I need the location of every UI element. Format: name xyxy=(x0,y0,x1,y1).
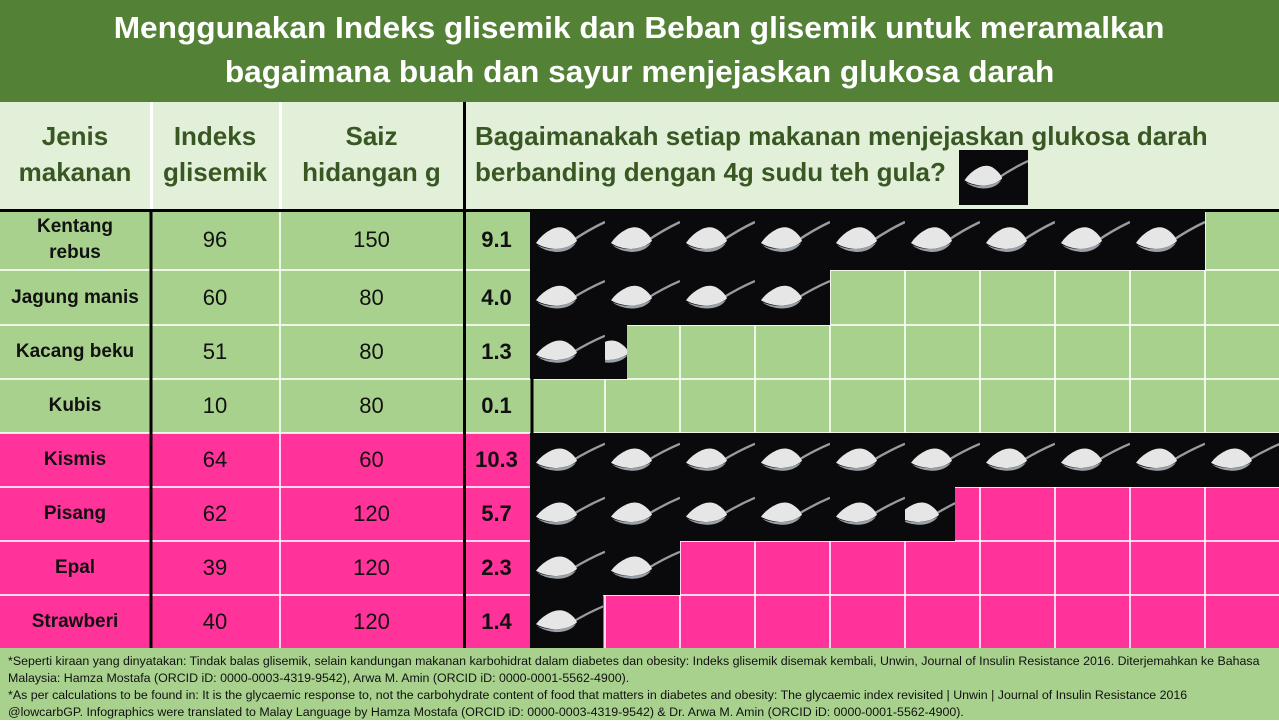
row: Jagung manis xyxy=(0,270,1279,325)
footer: references: *As per calculations to be found in: It is the glycaemic response to, not the carbohydrate content of food that matters in diabetes and obesity: The glycaemic index revisited | Unwin | Journal of Insulin Resistance 2016 xyxy=(8,688,1187,702)
row: Kentang rebus: 9.1 xyxy=(481,227,512,252)
table rows xyxy=(0,212,1279,648)
row: Jagung manis: 4.0 xyxy=(481,284,512,310)
row: Kacang beku: Kacang beku xyxy=(16,341,134,362)
row: Kentang rebus: Kentang xyxy=(37,216,113,237)
row: Pisang: 5.7 xyxy=(481,501,512,526)
header: question: Bagaimanakah setiap makanan menjejaskan glukosa darah xyxy=(475,121,1208,151)
row: Kentang rebus xyxy=(0,210,1279,270)
row: Jagung manis: 80 xyxy=(359,284,384,310)
row: Jagung manis: Jagung manis xyxy=(11,286,139,308)
row: Epal: Epal xyxy=(55,557,95,578)
row: Strawberi xyxy=(0,595,1279,648)
row: Kismis: 64 xyxy=(203,447,227,472)
footer: references xyxy=(0,648,1279,720)
row: Kubis: Kubis xyxy=(49,395,101,416)
row: Strawberi: Strawberi xyxy=(32,610,118,632)
row: Kacang beku xyxy=(0,325,1279,379)
row: Strawberi: 120 xyxy=(353,608,390,634)
spoons: Kacang beku 1.3 xyxy=(530,325,627,379)
row: Pisang: 62 xyxy=(203,501,227,526)
row: Kacang beku: 51 xyxy=(203,339,227,364)
row: Kentang rebus: 96 xyxy=(203,227,227,252)
footer: references: Malaysia: Hamza Mostafa (ORCID iD: 0000-0003-4319-9542), Arwa M. Amin (ORCID iD: 0000-0001-5562-4900). xyxy=(8,671,629,685)
footer: references: @lowcarbGP. Infographics were translated to Malay Language by Hamza Mostafa (ORCID iD: 0000-0003-4319-9542) & Dr. Arwa M. Amin (ORCID iD: 0000-0001-5562-4900). xyxy=(8,705,964,719)
row: Epal xyxy=(0,541,1279,595)
header: jenis makanan: makanan xyxy=(19,157,131,187)
row: Kismis: 60 xyxy=(359,447,384,472)
row: Kismis: Kismis xyxy=(44,449,106,470)
spoons: Pisang 5.7 xyxy=(530,487,955,541)
spoons: Jagung manis 4 xyxy=(530,270,830,325)
header: saiz hidangan: hidangan g xyxy=(302,157,441,187)
header: question xyxy=(475,121,1208,187)
title xyxy=(0,0,1279,102)
spoons: Kismis 10 xyxy=(530,433,1279,487)
row: Kentang rebus: rebus xyxy=(49,242,101,263)
title: Menggunakan Indeks glisemik dan Beban glisemik untuk meramalkan xyxy=(114,10,1165,45)
row: Pisang: 120 xyxy=(353,501,390,526)
header: indeks glisemik: Indeks xyxy=(174,121,256,151)
spoons: Epal 2 xyxy=(530,541,680,595)
header: jenis makanan: Jenis xyxy=(42,121,108,151)
row: Kentang rebus: 150 xyxy=(353,227,390,252)
header: jenis makanan xyxy=(19,121,131,187)
title: bagaimana buah dan sayur menjejaskan glukosa darah xyxy=(225,54,1054,89)
spoons: Strawberi 1 xyxy=(530,595,603,648)
row: Kismis: 10.3 xyxy=(475,447,518,472)
row: Epal: 120 xyxy=(353,555,390,580)
row: Strawberi: 40 xyxy=(203,608,227,634)
row: Kacang beku: 1.3 xyxy=(481,339,512,364)
row: Kubis: 80 xyxy=(359,393,384,418)
row: Epal: 39 xyxy=(203,555,227,580)
icon: spoon of sugar xyxy=(959,150,1028,205)
header: saiz hidangan xyxy=(302,121,441,187)
header: indeks glisemik: glisemik xyxy=(163,157,267,187)
footer: references: *Seperti kiraan yang dinyatakan: Tindak balas glisemik, selain kandungan makanan karbohidrat dalam diabetes dan obesity: Indeks glisemik disemak kembali, Unwin, Journal of Insulin Resistance 2016. Diterjemahkan ke Bahasa xyxy=(8,654,1259,668)
row: Epal: 2.3 xyxy=(481,555,512,580)
row: Kacang beku: 80 xyxy=(359,339,384,364)
row: Pisang: Pisang xyxy=(44,503,106,524)
header: question: berbanding dengan 4g sudu teh gula? xyxy=(475,157,946,187)
row: Kubis xyxy=(0,379,1279,433)
row: Jagung manis: 60 xyxy=(203,284,227,310)
header: indeks glisemik xyxy=(163,121,267,187)
row: Kubis: 0.1 xyxy=(481,393,512,418)
spoons: Kentang rebus 9 xyxy=(530,210,1205,270)
row: Strawberi: 1.4 xyxy=(481,608,512,634)
row: Pisang xyxy=(0,487,1279,541)
header: saiz hidangan: Saiz xyxy=(345,121,398,151)
header row xyxy=(0,102,1279,210)
row: Kismis xyxy=(0,433,1279,487)
row: Kubis: 10 xyxy=(203,393,227,418)
